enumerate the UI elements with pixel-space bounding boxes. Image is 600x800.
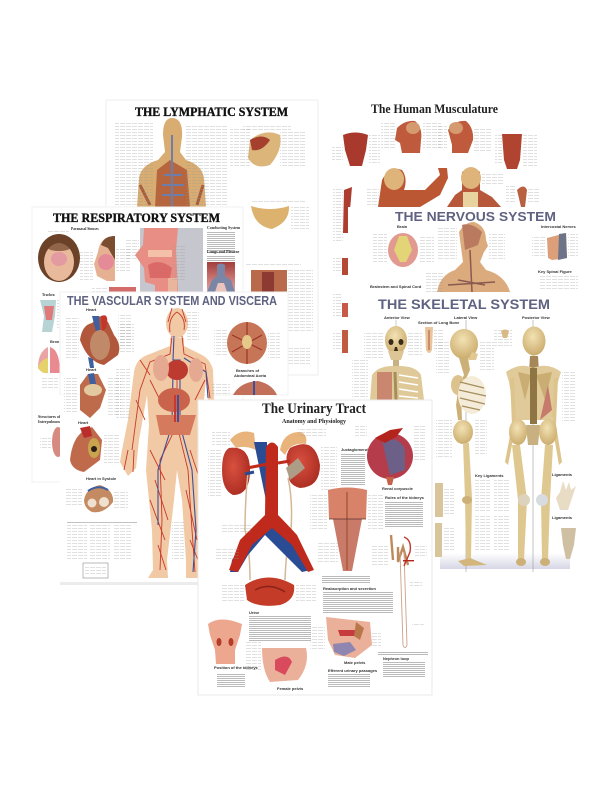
- brain illustration: [373, 233, 434, 267]
- abdominal aorta branches: Abdominal Aorta: [234, 373, 267, 378]
- heart posterior: [64, 367, 121, 418]
- structures of interpulmonary: [38, 414, 66, 457]
- sinus labels: [47, 229, 130, 282]
- larynx: Trachea: [42, 293, 55, 297]
- muscle forearm: [506, 184, 540, 207]
- urinary left labels: [208, 428, 337, 559]
- ureters: [245, 472, 292, 580]
- adrenal glands: [230, 432, 306, 455]
- heart anterior: [65, 307, 131, 368]
- key table: Key Ligaments: [475, 473, 504, 478]
- renal pyramid section: [310, 488, 383, 583]
- heart section: Heart: [78, 420, 89, 425]
- bladder: [222, 578, 316, 606]
- male pelvis: [310, 617, 381, 665]
- vena cava and iliac veins: [230, 442, 311, 572]
- small reference box: [83, 563, 108, 578]
- heart posterior: Heart: [86, 367, 97, 372]
- panel: nervous system poster: [348, 207, 582, 297]
- lymphatic labels: [115, 122, 227, 207]
- view headings: [384, 315, 551, 320]
- conducting system text: Lungs and Pleurae: [207, 249, 239, 254]
- nephron: [372, 535, 428, 656]
- lateral skeleton: [436, 320, 494, 572]
- floor shadow: [440, 553, 570, 569]
- view headings: Anterior View: [384, 315, 411, 320]
- conducting system text: [207, 225, 241, 262]
- intercostal nerves: Intercostal Nerves: [541, 224, 576, 229]
- amniotic text block: Juxtaglomerular: [341, 447, 373, 452]
- panel: respiratory system poster: [32, 207, 243, 482]
- paranasal sinuses heading: Paranasal Sinuses: [71, 227, 99, 231]
- renal tube text: [383, 656, 425, 678]
- amniotic text block: [341, 447, 373, 485]
- pelvic lymph illustration: [245, 263, 313, 364]
- female head side: [94, 236, 115, 281]
- brain heading: Brain: [397, 224, 408, 229]
- brain base: [214, 322, 280, 364]
- larynx: [40, 293, 60, 332]
- ligaments of right knee and ankle: [435, 483, 454, 557]
- heart in systole: Heart in Systole: [86, 476, 117, 481]
- structures of interpulmonary: Structures of: [38, 414, 61, 419]
- lungs lower left: Bronchi: [50, 339, 65, 344]
- torso with kidneys: Position of the kidneys: [214, 665, 259, 670]
- anatomical male figure: [116, 308, 214, 578]
- panel: urinary tract poster: [198, 400, 432, 695]
- conducting system text: Conducting System: [207, 225, 241, 230]
- musculature title: The Human Musculature: [371, 101, 498, 116]
- lungs lower left: [38, 339, 65, 390]
- muscle arm flexed figure: [367, 168, 448, 207]
- ligaments of right hand: [552, 472, 576, 510]
- anterior skeleton: [352, 320, 424, 400]
- kidney function text: Roles of the kidneys: [385, 495, 425, 500]
- ligaments of right foot: Ligaments: [552, 515, 573, 520]
- female pelvis: [245, 642, 307, 691]
- panel: vascular system poster: [60, 292, 288, 585]
- view headings: Lateral View: [454, 315, 478, 320]
- liver and spleen illustration: [230, 125, 306, 168]
- respiratory mucosa inset: [92, 286, 136, 292]
- torso with kidneys: [208, 620, 259, 688]
- small intestine illustration: [251, 199, 309, 229]
- structures of interpulmonary: Interpulmonary: [38, 419, 66, 424]
- reabsorption text block: [323, 586, 393, 613]
- renal tube text: Nephron loop: [383, 656, 410, 661]
- panel: skeletal system poster: [348, 292, 580, 590]
- heart anterior: Heart: [86, 307, 97, 312]
- sagittal head section: [125, 228, 203, 292]
- muscle strip details: [333, 258, 348, 353]
- panel: human musculature poster: [330, 100, 548, 377]
- spinal nerve table: Key Spinal Figure: [538, 269, 573, 274]
- lungs silhouette: [207, 262, 235, 292]
- ligaments of right foot: [552, 515, 576, 559]
- vascular title: THE VASCULAR SYSTEM AND VISCERA: [67, 293, 278, 308]
- renal corpuscle: Renal corpuscle: [382, 486, 414, 491]
- muscle back: [495, 134, 537, 169]
- respiratory title: THE RESPIRATORY SYSTEM: [53, 211, 220, 225]
- aorta and iliac arteries: [229, 442, 314, 572]
- kidneys: [222, 444, 320, 495]
- muscle long arm: [333, 187, 352, 242]
- urine text block: [249, 610, 311, 641]
- abdominal aorta branches: Branches of: [236, 368, 260, 373]
- heart section: [70, 420, 119, 472]
- lymphatic figure: [137, 118, 206, 207]
- male pelvis: Male pelvis: [344, 660, 366, 665]
- head and shoulders nerve figure: [425, 222, 510, 292]
- efferent urinary passages text: [328, 668, 378, 687]
- female face front: [38, 234, 80, 282]
- muscle head right view: [381, 121, 441, 153]
- intercostal nerves: [532, 224, 578, 260]
- nervous title: THE NERVOUS SYSTEM: [395, 209, 556, 224]
- efferent urinary passages text: Efferent urinary passages: [328, 668, 378, 673]
- renal corpuscle: [355, 424, 425, 491]
- ligaments of right hand: Ligaments: [552, 472, 573, 477]
- urine text block: Urine: [249, 610, 260, 615]
- muscle back of head and shoulder: [447, 167, 504, 207]
- long bone: Section of Long Bone: [418, 320, 460, 325]
- abdominal aorta branches: [212, 368, 277, 395]
- kidney function text: [385, 495, 425, 528]
- posterior skeleton: [494, 320, 576, 572]
- lymphatic title: THE LYMPHATIC SYSTEM: [135, 104, 288, 119]
- skeletal title: THE SKELETAL SYSTEM: [378, 297, 550, 312]
- spinal nerve table: [538, 269, 578, 291]
- view headings: Posterior View: [522, 315, 551, 320]
- urinary subtitle: Anatomy and Physiology: [282, 418, 347, 425]
- reabsorption text block: Reabsorption and secretion: [323, 586, 376, 591]
- urinary title: The Urinary Tract: [262, 401, 366, 417]
- long bone: [418, 320, 460, 353]
- heart in systole: [66, 476, 128, 512]
- panel: lymphatic system poster: [106, 100, 318, 375]
- brainstem heading: Brainstem and Spinal Cord: [370, 284, 422, 289]
- female pelvis: Female pelvis: [277, 686, 304, 691]
- muscle torso front: [332, 132, 380, 166]
- key to figures table: [67, 522, 137, 560]
- muscle head left view: [437, 121, 492, 153]
- key table: [475, 473, 509, 552]
